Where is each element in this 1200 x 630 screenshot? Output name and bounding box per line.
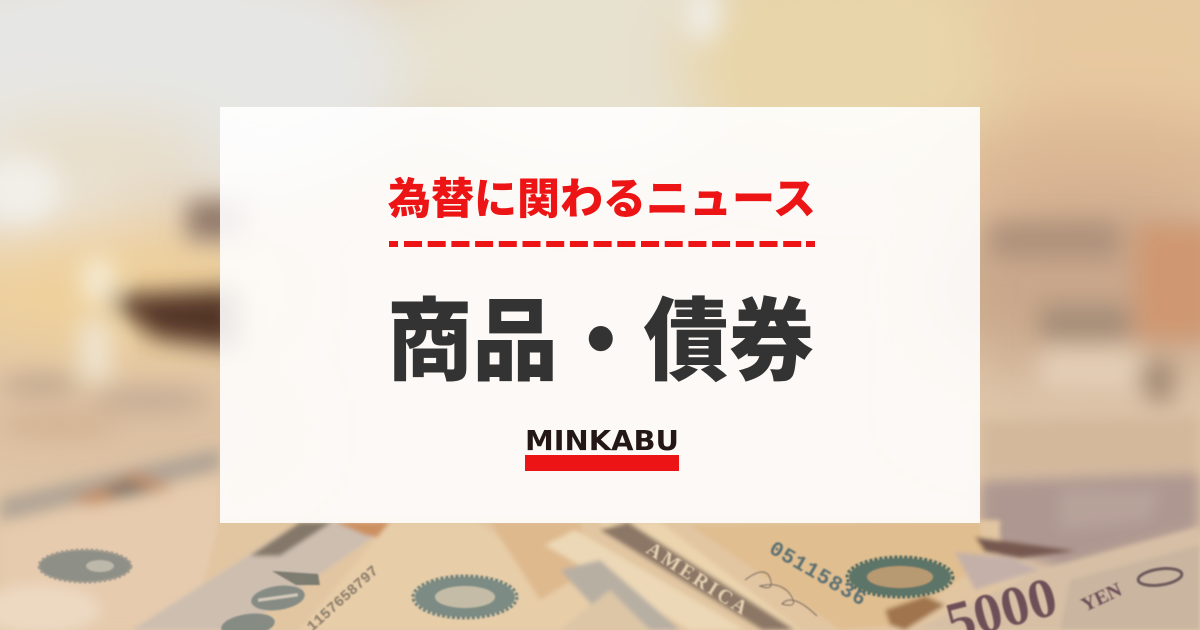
main heading: commodities and bonds: 商品・債券 [387, 293, 814, 392]
background photo: blurred banknotes: AMERICA [642, 538, 754, 621]
subtitle: news about forex: 為替に関わるニュース [388, 176, 816, 224]
background photo: blurred banknotes: 05115836 [764, 538, 870, 612]
logo red bar [525, 455, 679, 471]
background photo: blurred banknotes: YEN [1078, 579, 1126, 617]
MINKABU logo [525, 429, 679, 471]
red dashed divider [389, 241, 815, 247]
translucent centre card [220, 107, 980, 523]
